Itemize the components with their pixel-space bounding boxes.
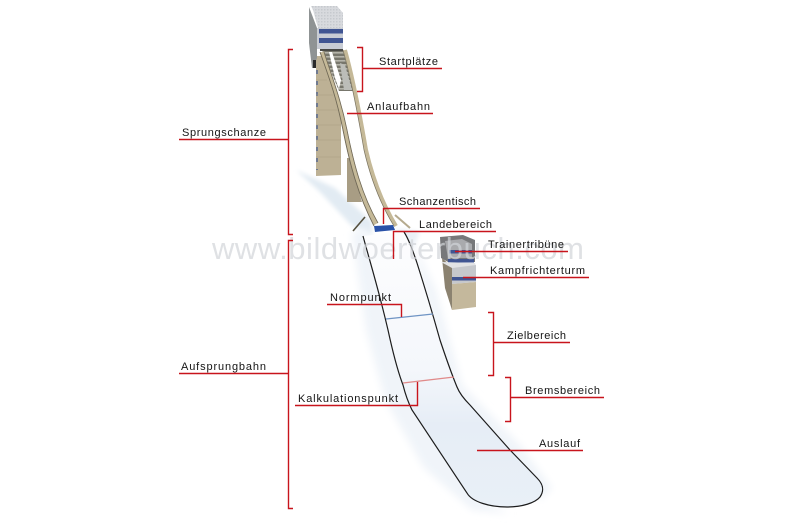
in-run track bbox=[320, 50, 396, 226]
label: Auslauf bbox=[477, 438, 583, 450]
label: Sprungschanze bbox=[179, 50, 293, 234]
norm point line bbox=[386, 314, 433, 319]
lower support bbox=[347, 158, 362, 202]
start tower building bbox=[309, 6, 343, 68]
label: Landebereich: Landebereich bbox=[419, 219, 492, 231]
label: Aufsprungbahn: Aufsprungbahn bbox=[181, 361, 266, 373]
label: Kampfrichterturm: Kampfrichterturm bbox=[490, 265, 585, 277]
judges tower bbox=[440, 235, 476, 310]
label: Anlaufbahn: Anlaufbahn bbox=[367, 101, 430, 113]
label: Trainertribüne: Trainertribüne bbox=[488, 239, 564, 251]
label: Schanzentisch: Schanzentisch bbox=[399, 196, 476, 208]
label: Startplätze bbox=[357, 48, 442, 92]
tower pillar bbox=[316, 56, 341, 176]
watermark: www.bildwoerterbuch.com bbox=[211, 231, 584, 266]
label: Kalkulationspunkt bbox=[295, 382, 418, 406]
label: Bremsbereich bbox=[505, 378, 604, 422]
take-off table bbox=[374, 225, 395, 232]
label: Normpunkt: Normpunkt bbox=[330, 292, 391, 304]
label: Bremsbereich: Bremsbereich bbox=[525, 385, 600, 397]
label: Schanzentisch bbox=[384, 196, 480, 224]
label: Normpunkt bbox=[327, 292, 402, 317]
label: Startplätze: Startplätze bbox=[379, 56, 438, 68]
label: Aufsprungbahn bbox=[179, 240, 293, 508]
label: Auslauf: Auslauf bbox=[539, 438, 581, 450]
snow surroundings bbox=[296, 170, 552, 514]
label: Zielbereich: Zielbereich bbox=[507, 330, 566, 342]
table supports bbox=[353, 215, 410, 231]
label: Kalkulationspunkt: Kalkulationspunkt bbox=[298, 393, 398, 405]
landing and outrun slope bbox=[363, 232, 543, 507]
label: Trainertribüne bbox=[455, 239, 568, 252]
label: Landebereich bbox=[394, 219, 496, 259]
calculation point line bbox=[403, 377, 454, 383]
label: Sprungschanze: Sprungschanze bbox=[182, 127, 266, 139]
label: Zielbereich bbox=[488, 312, 570, 376]
